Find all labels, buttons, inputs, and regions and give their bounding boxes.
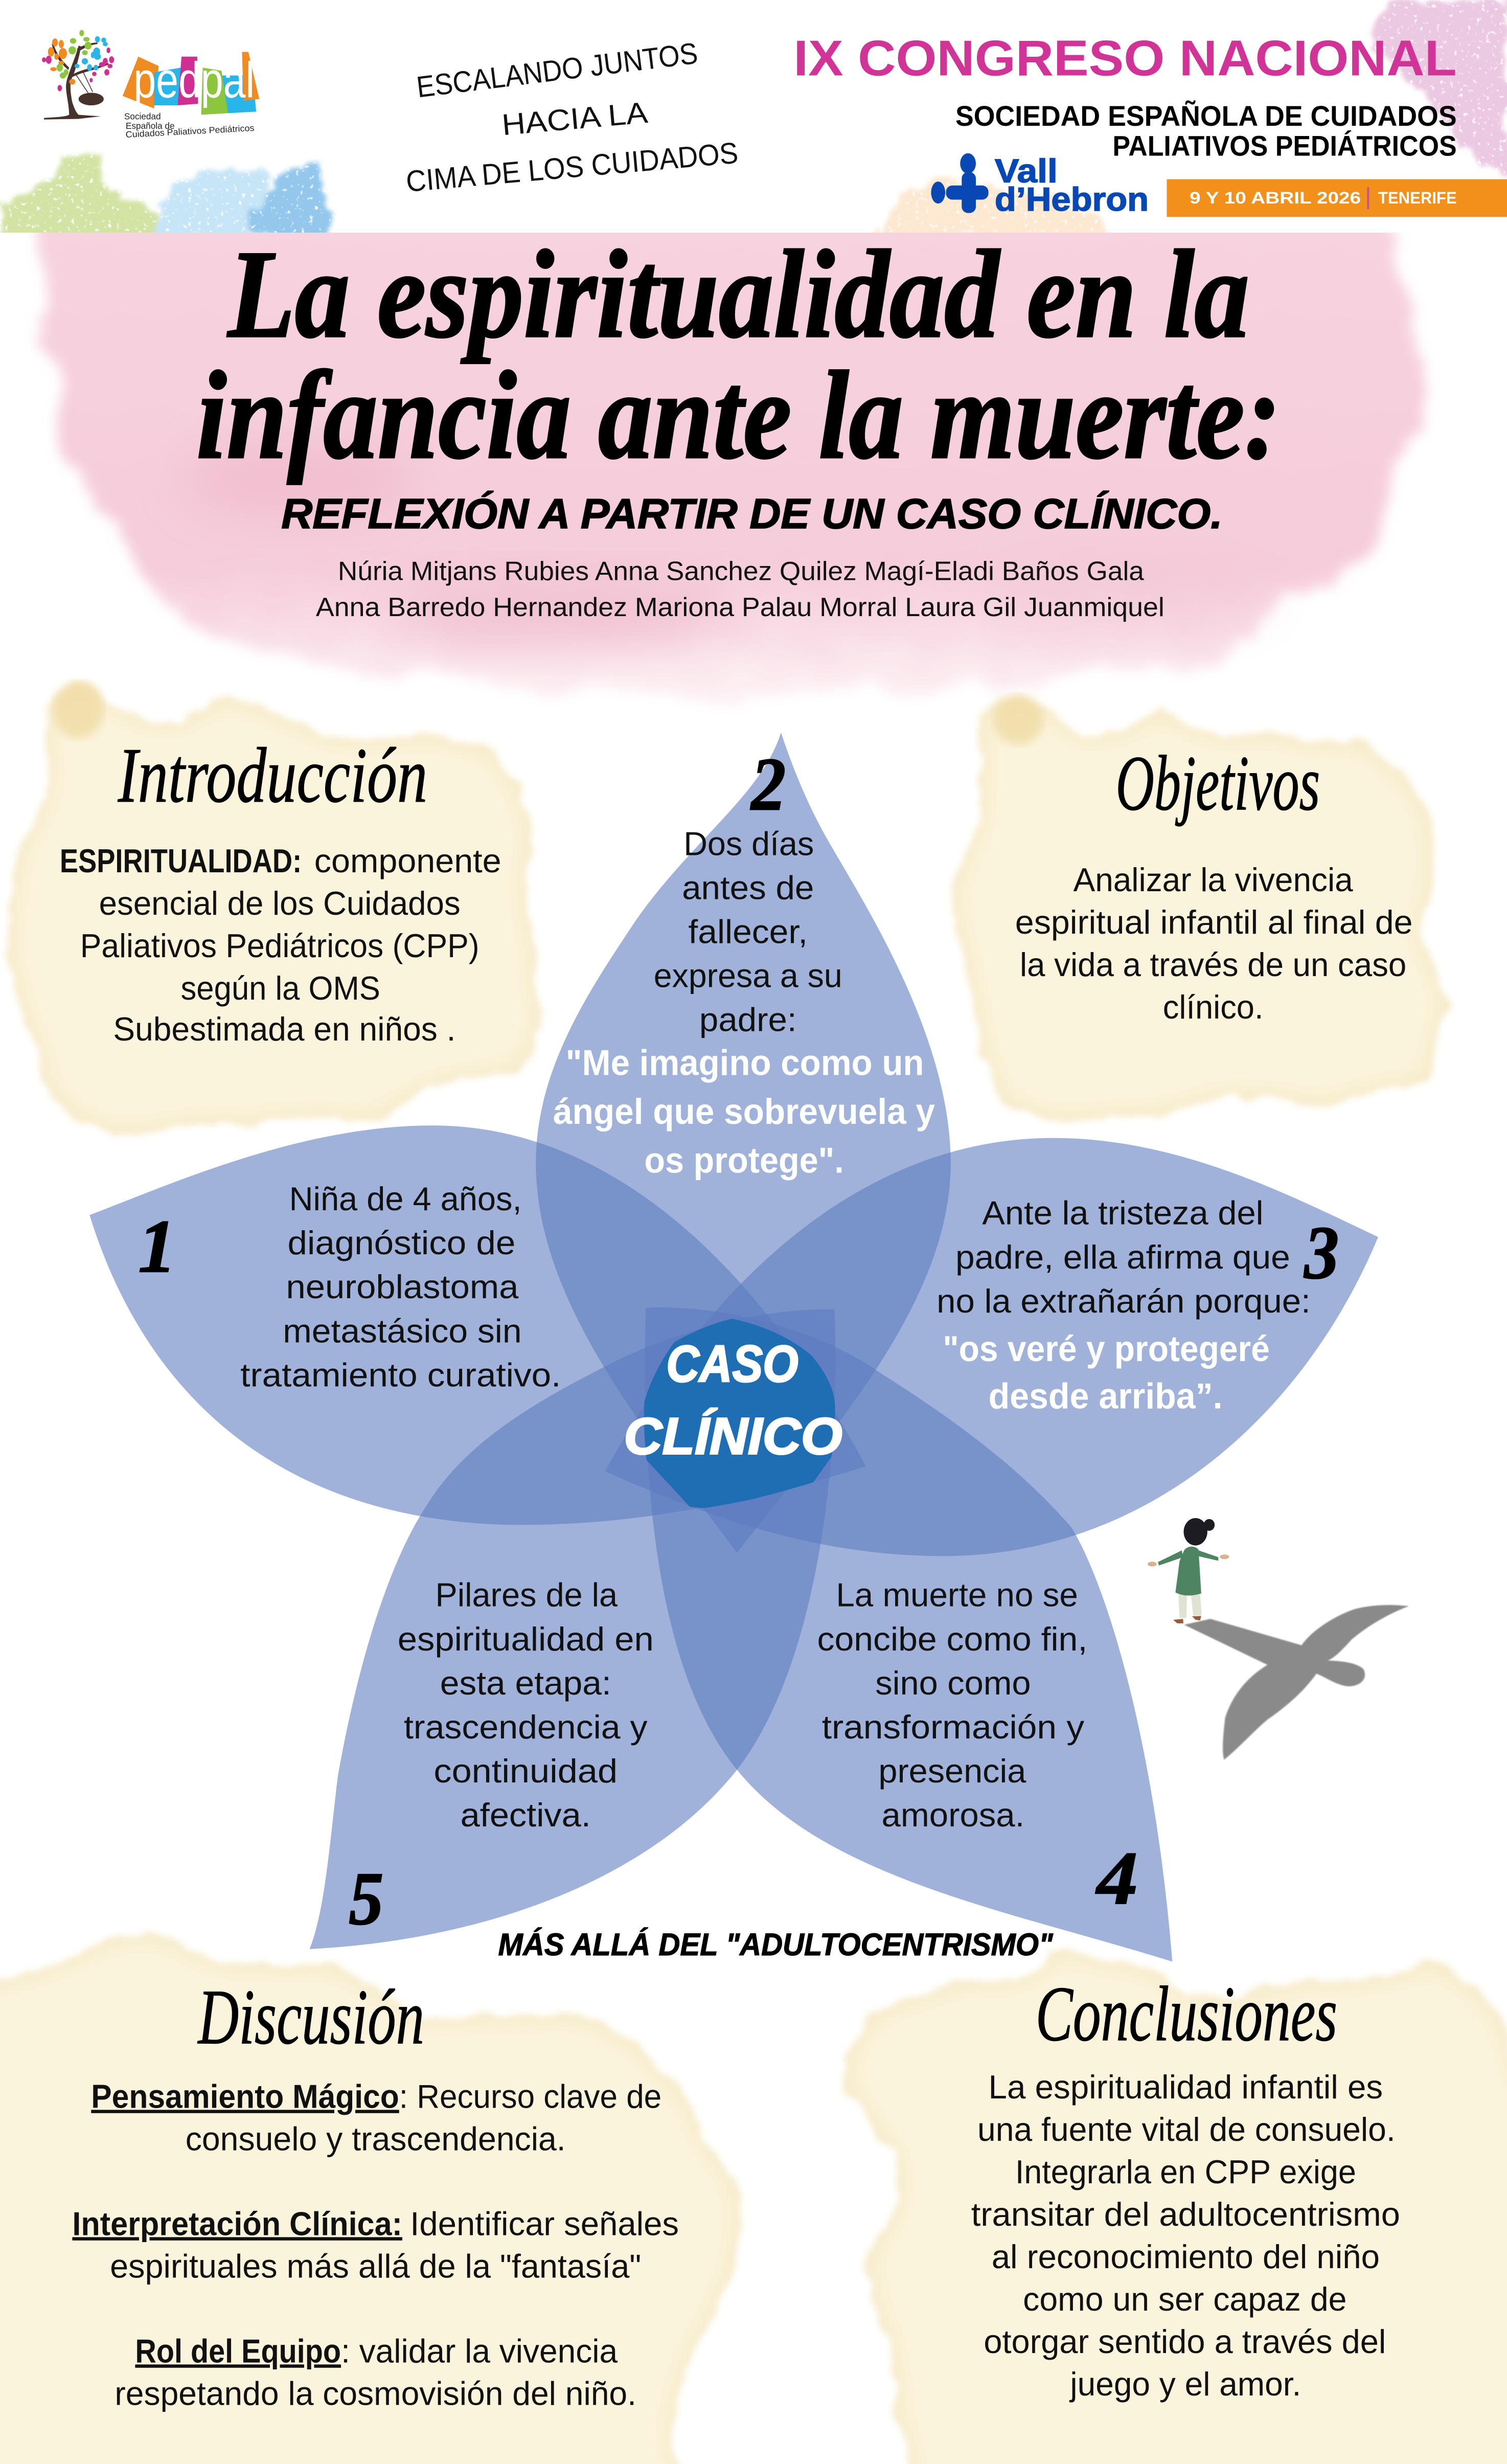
item: interpretación clínica: Interpretación Clínica: (72, 2205, 402, 2242)
logo: Vall d'Hebron (931, 153, 1149, 218)
logo: Pedpal wordmark: pedpal (133, 52, 255, 108)
logo: Pedpal wordmark: Sociedad (124, 111, 161, 122)
petal 5 text: espiritualidad en (398, 1621, 654, 1658)
heading: Introducción (118, 732, 427, 819)
body text: Subestimada en niños . (113, 1011, 455, 1048)
congress tagline: ESCALANDO JUNTOS (415, 37, 699, 104)
petal 5 text: trascendencia y (404, 1709, 648, 1746)
body text: clínico. (1163, 989, 1264, 1026)
item: interpretación clínica: espirituales más allá de la "fantasía" (110, 2248, 641, 2285)
item: pensamiento mágico: : Recurso clave de (399, 2078, 661, 2115)
petal 4 text: sino como (875, 1665, 1031, 1702)
caption: MÁS ALLÁ DEL "ADULTOCENTRISMO" (498, 1927, 1053, 1962)
body text (1015, 862, 1413, 1026)
body text: otorgar sentido a través del (984, 2323, 1386, 2360)
centre core (644, 1319, 835, 1508)
petal 2 text: padre: (699, 1002, 797, 1038)
centre label (624, 1335, 842, 1465)
main title: infancia ante la muerte: (196, 346, 1281, 485)
body text (60, 843, 501, 1048)
body text: una fuente vital de consuelo. (977, 2111, 1396, 2148)
title panel: pink watercolor wash (40, 205, 1422, 700)
logo: Pedpal tree with swing (42, 30, 114, 120)
petal 1 text (240, 1181, 561, 1393)
chart: flower of five petals (89, 733, 1378, 1961)
petal 4 text: presencia (878, 1753, 1026, 1790)
body text: espiritual infantil al final de (1015, 904, 1413, 941)
authors (316, 556, 1164, 622)
petal 1 text: diagnóstico de (288, 1225, 515, 1261)
congress tagline (405, 37, 740, 198)
petal 3 text: no la extrañarán porque: (937, 1283, 1311, 1320)
body text: Paliativos Pediátricos (CPP) (80, 928, 480, 964)
logo: Pedpal wordmark: Cuidados Paliativos Pediátricos (125, 123, 255, 140)
body text: La espiritualidad infantil es (989, 2069, 1383, 2106)
item: pensamiento mágico (91, 2078, 661, 2157)
petal 5 text: esta etapa: (440, 1665, 611, 1702)
petal 2 text (553, 825, 935, 1180)
congress title: IX CONGRESO NACIONAL (793, 30, 1457, 86)
panel background: cream wash (9, 679, 542, 1135)
heading: Conclusiones (1036, 1971, 1337, 2058)
petal 2 text: os protege". (644, 1140, 844, 1180)
date banner: 9 Y 10 ABRIL 2026 (1190, 189, 1361, 207)
petal 1 text: neuroblastoma (286, 1269, 519, 1305)
organising society (955, 100, 1457, 162)
body text: componente (314, 843, 501, 879)
item: pensamiento mágico: Pensamiento Mágico (91, 2078, 399, 2115)
logo: Vall d'Hebron: Vall (995, 153, 1058, 190)
body text: transitar del adultocentrismo (971, 2196, 1400, 2233)
panel: discusión background (0, 1930, 740, 2464)
body text: la vida a través de un caso (1020, 946, 1406, 983)
header watercolor splashes (0, 0, 1507, 239)
petal 5 text: afectiva. (461, 1797, 591, 1834)
petal 5 (310, 1309, 835, 1949)
petal 4 text: amorosa. (882, 1797, 1024, 1834)
illustration: child with angel-wing shadow (1148, 1518, 1409, 1760)
petal 5 text: continuidad (433, 1753, 618, 1790)
number 5: 5 (349, 1857, 383, 1940)
congress tagline: CIMA DE LOS CUIDADOS (405, 137, 740, 198)
number 3: 3 (1304, 1211, 1339, 1294)
petal 2 text: Dos días (683, 825, 814, 862)
petal 3 text: Ante la tristeza del (982, 1195, 1264, 1232)
petal 3 text: padre, ella afirma que (955, 1239, 1290, 1276)
panel: conclusiones background (846, 1952, 1507, 2464)
body text: según la OMS (181, 970, 380, 1007)
petal 5 text: Pilares de la (436, 1577, 618, 1614)
panel: objetivos (946, 692, 1450, 1121)
item: rol del equipo (115, 2333, 636, 2412)
petal 3 (605, 1138, 1378, 1556)
number 2: 2 (750, 742, 786, 826)
petal 3 text: "os veré y protegeré (943, 1328, 1270, 1369)
petal 2 text: expresa a su (654, 958, 842, 994)
body text (971, 2069, 1400, 2403)
authors: Anna Barredo Hernandez Mariona Palau Morral Laura Gil Juanmiquel (316, 593, 1164, 622)
logo: Pedpal wordmark (123, 52, 259, 140)
panel: introducción (9, 679, 542, 1135)
item: interpretación clínica: Identificar señales (410, 2205, 679, 2242)
petal 3 text: desde arriba”. (989, 1375, 1223, 1416)
body text: esencial de los Cuidados (99, 885, 461, 922)
body text: como un ser capaz de (1023, 2281, 1346, 2318)
item: pensamiento mágico: consuelo y trascendencia. (186, 2120, 566, 2157)
petal 4 text: La muerte no se (836, 1577, 1078, 1614)
body text: al reconocimiento del niño (992, 2239, 1380, 2275)
petal 4 text: concibe como fin, (817, 1621, 1087, 1658)
petal 5 text (398, 1577, 654, 1834)
subtitle: REFLEXIÓN A PARTIR DE UN CASO CLÍNICO. (281, 490, 1223, 537)
petal 2 text: ángel que sobrevuela y (553, 1091, 935, 1132)
petal 4 (645, 1307, 1172, 1961)
main title (196, 225, 1281, 485)
petal 4 text (817, 1577, 1087, 1834)
item: rol del equipo: Rol del Equipo (135, 2333, 341, 2369)
date banner (1167, 179, 1507, 217)
congress tagline: HACIA LA (500, 96, 649, 142)
petal 1 text: tratamiento curativo. (240, 1357, 561, 1393)
date banner: TENERIFE (1378, 189, 1457, 207)
petal 1 text: metastásico sin (283, 1313, 522, 1349)
panel: conclusiones content (971, 1971, 1400, 2403)
centre label: CASO (666, 1335, 798, 1393)
panel background: cream wash (946, 692, 1450, 1121)
petal 4 text: transformación y (822, 1709, 1085, 1746)
logo: Pedpal wordmark: Española de (126, 121, 175, 131)
body text: Integrarla en CPP exige (1015, 2154, 1356, 2190)
heading: Objetivos (1116, 740, 1320, 827)
petal 3 text (937, 1195, 1311, 1416)
petal 1 text: Niña de 4 años, (289, 1181, 522, 1217)
body text: ESPIRITUALIDAD: (60, 843, 302, 879)
authors: Núria Mitjans Rubies Anna Sanchez Quilez Magí-Eladi Baños Gala (338, 556, 1145, 586)
item: rol del equipo: respetando la cosmovisión del niño. (115, 2375, 636, 2412)
petal 2 text: antes de (682, 869, 814, 906)
heading: Discusión (197, 1974, 424, 2061)
logo: Vall d'Hebron: d’Hebron (995, 181, 1149, 218)
number 4: 4 (1095, 1837, 1138, 1920)
organising society: SOCIEDAD ESPAÑOLA DE CUIDADOS (955, 100, 1457, 132)
petal 2 text: "Me imagino como un (566, 1043, 924, 1083)
centre label: CLÍNICO (624, 1408, 842, 1465)
panel: discusión content (72, 1974, 679, 2412)
main title: La espiritualidad en la (227, 225, 1249, 364)
body text: Analizar la vivencia (1074, 862, 1353, 898)
item: interpretación clínica (72, 2205, 679, 2285)
number 1: 1 (139, 1205, 176, 1288)
petal 2 text: fallecer, (688, 913, 808, 950)
item: rol del equipo: : validar la vivencia (341, 2333, 618, 2369)
petal 2 (536, 733, 951, 1553)
body text: juego y el amor. (1069, 2366, 1301, 2403)
petal 1 (89, 1125, 866, 1525)
organising society: PALIATIVOS PEDIÁTRICOS (1112, 130, 1457, 162)
